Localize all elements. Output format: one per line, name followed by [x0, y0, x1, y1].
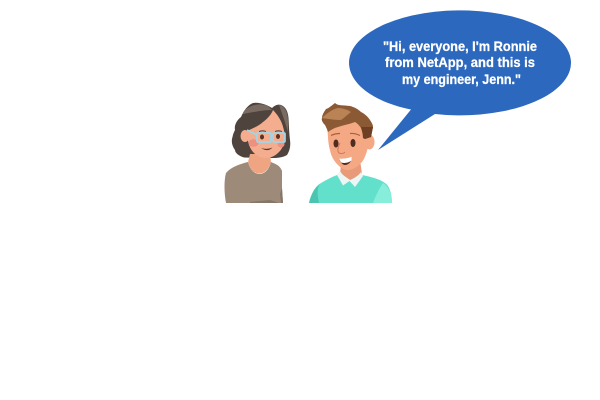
character: man Ronnie [309, 103, 392, 203]
man neck [340, 160, 362, 180]
bubble text: "Hi, everyone, I'm Ronnie [383, 39, 537, 54]
man mouth [339, 156, 352, 165]
man hair [322, 103, 373, 139]
man shirt right highlight [373, 183, 392, 203]
man collar [337, 171, 363, 187]
woman arm fold [250, 188, 283, 203]
woman ear [240, 130, 250, 142]
speech bubble [349, 10, 571, 150]
bubble text: my engineer, Jenn." [402, 72, 521, 87]
woman cheeks [248, 139, 284, 148]
bubble text [383, 39, 537, 87]
man hair dark side [361, 127, 373, 139]
woman hair highlight [243, 104, 288, 132]
man eyes [334, 139, 356, 148]
man eyebrows [331, 133, 360, 136]
woman eyes [259, 130, 282, 140]
woman hair back [232, 103, 290, 158]
woman torso [224, 162, 283, 203]
man shirt [309, 175, 392, 203]
man ear [364, 134, 374, 150]
woman glasses [247, 130, 285, 142]
man nose [338, 143, 345, 154]
man face [327, 118, 369, 170]
man hair highlight [322, 108, 351, 120]
man teeth [339, 156, 352, 163]
woman smile [261, 148, 272, 150]
woman neck [248, 154, 271, 174]
man shirt left shade [309, 184, 320, 203]
woman face [247, 110, 285, 158]
character: woman engineer Jenn [224, 103, 290, 203]
bubble shape [349, 10, 571, 150]
bubble text: from NetApp, and this is [385, 55, 535, 70]
